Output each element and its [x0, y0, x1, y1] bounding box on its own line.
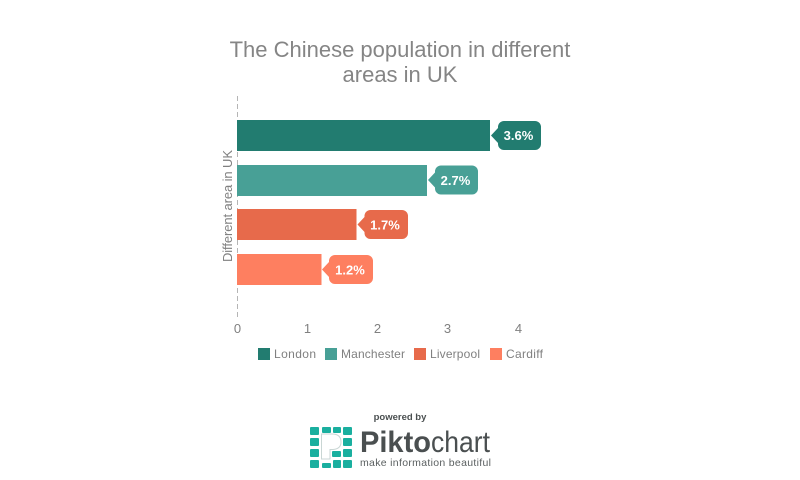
bar: Liverpool: 1.7% [370, 218, 400, 232]
legend: Cardiff [506, 347, 544, 361]
bar: Manchester: 2.7% [441, 173, 471, 188]
logo wordmark: Pikto [360, 426, 431, 459]
bar: London: 3.6% [504, 128, 534, 143]
bar: Cardiff: 1.2% [335, 262, 365, 278]
title [230, 37, 570, 87]
x axis labels: 4 [515, 321, 522, 336]
x axis labels [234, 321, 522, 336]
x axis labels: 0 [234, 321, 241, 336]
bar: London [237, 120, 541, 151]
legend: Manchester [341, 347, 405, 361]
powered by label: powered by [374, 412, 427, 423]
title: areas in UK [343, 62, 458, 87]
logo wordmark [360, 426, 491, 459]
title: The Chinese population in different [230, 37, 570, 62]
x axis labels: 2 [374, 321, 381, 336]
logo tagline: make information beautiful [360, 457, 491, 469]
icon: Piktochart logo [310, 427, 352, 468]
legend [258, 347, 544, 361]
bar: Cardiff [237, 254, 373, 285]
bar chart [237, 120, 541, 285]
bar: Liverpool [237, 209, 408, 240]
x axis labels: 3 [444, 321, 451, 336]
logo wordmark: chart [431, 426, 491, 459]
legend: London [274, 347, 316, 361]
x axis labels: 1 [304, 321, 311, 336]
y axis title: Different area in UK [220, 150, 235, 262]
bar: Manchester [237, 165, 478, 196]
axis line [236, 96, 238, 320]
legend: Liverpool [430, 347, 480, 361]
